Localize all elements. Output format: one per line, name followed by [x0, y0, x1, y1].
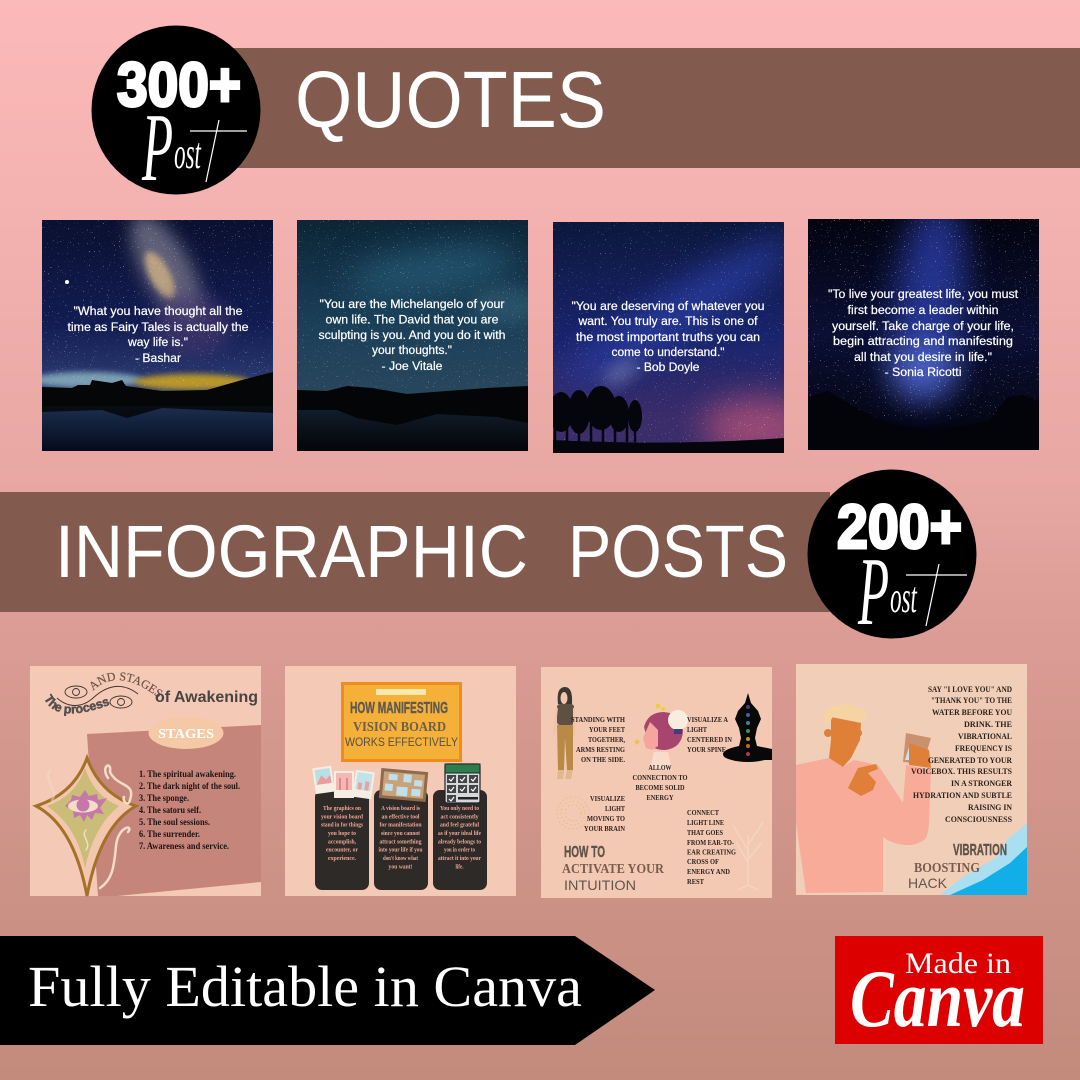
- label: stages: STAGES: [158, 727, 214, 742]
- card: graphics: experience.: [328, 855, 356, 862]
- text: visualize spine: VISUALIZE A: [687, 715, 729, 724]
- card: graphics: encounter, or: [326, 847, 358, 854]
- text: visualize spine: LIGHT: [687, 725, 707, 734]
- badge number: 300+: [117, 51, 241, 120]
- badge script word: P: [142, 92, 173, 201]
- quote text: yourself. Take charge of your life,: [832, 321, 1014, 333]
- text: connect light line: REST: [687, 877, 704, 886]
- list: seven stages: 5. The soul sessions.: [139, 817, 210, 827]
- text: visualize brain: VISUALIZE: [590, 794, 625, 803]
- quote text: - Bob Doyle: [636, 362, 700, 374]
- text: connect light line: CONNECT: [687, 808, 719, 817]
- quote text: way life is.": [127, 337, 188, 349]
- icon: calendar with checks: [445, 764, 480, 803]
- title: vibration boosting hack: VIBRATION: [953, 842, 1007, 859]
- card: vision board tool: into your life if you: [378, 847, 423, 854]
- text: say i love you: IN A STRONGER: [951, 779, 1013, 788]
- quote text: [68, 306, 248, 365]
- curved title: The process: [45, 694, 110, 716]
- icon: polaroid photos: [312, 766, 375, 799]
- curved title: AND STAGES: [90, 672, 163, 697]
- text: say i love you: SAY "I LOVE YOU" AND: [928, 685, 1012, 694]
- card: act consistently: and feel grateful: [440, 822, 479, 829]
- sign: how manifesting vision board works effectively: HOW MANIFESTING: [350, 700, 448, 717]
- text: say i love you: [911, 685, 1013, 824]
- badge script word: [857, 536, 967, 645]
- banner text: Fully Editable in Canva: [28, 954, 582, 1019]
- infographic card: stages of awakening: [30, 666, 261, 896]
- text: connect light line: ENERGY AND: [687, 867, 730, 876]
- quote card: Sonia Ricotti: [808, 196, 1039, 450]
- text: say i love you: RAISING IN: [968, 803, 1012, 812]
- card: vision board tool: you want!: [388, 863, 412, 870]
- title: how to activate your intuition: ACTIVATE YOUR: [562, 862, 665, 877]
- text: visualize brain: MOVING TO: [587, 814, 625, 823]
- title: of awakening: of Awakening: [155, 689, 258, 706]
- title: vibration boosting hack: [909, 844, 1006, 888]
- badge script word: ost: [890, 573, 918, 622]
- card: act consistently: as if your ideal life: [438, 830, 481, 837]
- text: standing: YOUR FEET: [589, 725, 625, 734]
- text: standing: [571, 715, 625, 764]
- text: visualize brain: LIGHT: [605, 804, 625, 813]
- text: connect light line: EAR CREATING: [687, 848, 736, 856]
- illustration: man holding glass: [796, 703, 931, 893]
- quote text: first become a leader within: [848, 305, 998, 317]
- quote text: the most important truths you can: [576, 332, 760, 344]
- title: vibration boosting hack: HACK: [908, 875, 948, 891]
- quote text: - Sonia Ricotti: [884, 367, 962, 379]
- list: seven stages: 4. The satoru self.: [139, 805, 201, 815]
- list: seven stages: 2. The dark night of the soul.: [139, 781, 240, 791]
- title: how to activate your intuition: [562, 844, 665, 893]
- heading: infographic posts: POSTS: [568, 510, 788, 593]
- text: allow connection: ALLOW: [648, 763, 672, 772]
- quote card: Joe Vitale: [297, 220, 542, 451]
- quote text: "To live your greatest life, you must: [828, 289, 1019, 301]
- text: say i love you: HYDRATION AND SUBTLE: [913, 791, 1012, 800]
- card: act consistently: life.: [456, 863, 464, 870]
- text: connect light line: FROM EAR-TO-: [687, 838, 734, 847]
- heading: quotes: QUOTES: [295, 55, 606, 144]
- text: visualize spine: [687, 717, 732, 752]
- title: vibration boosting hack: BOOSTING: [914, 861, 980, 876]
- card: vision board tool: for manifestation: [380, 822, 422, 829]
- icon: sunburst: [557, 797, 589, 829]
- quote text: want. You truly are. This is one of: [577, 316, 758, 328]
- text: standing: ARMS RESTING: [576, 745, 625, 754]
- text: connect light line: THAT GOES: [687, 828, 723, 837]
- text: standing: STANDING WITH: [571, 715, 625, 724]
- quote text: "You are deserving of whatever you: [572, 301, 765, 313]
- card: act consistently: [433, 790, 487, 890]
- infographic card: vibration boosting hack: [796, 664, 1027, 895]
- text: allow connection: CONNECTION TO: [632, 773, 688, 782]
- sign: how manifesting vision board works effectively: [342, 684, 460, 760]
- text: connect light line: CROSS OF: [687, 857, 719, 866]
- card: act consistently: you in order to: [444, 847, 475, 854]
- label: stages: [148, 717, 224, 749]
- icon: standing woman: [554, 687, 574, 779]
- text: say i love you: VIBRATIONAL: [958, 732, 1012, 741]
- text: say i love you: VOICEBOX. THIS RESULTS: [911, 767, 1012, 776]
- infographic card: activate your intuition: [541, 667, 773, 898]
- curved title: [45, 672, 163, 716]
- card: act consistently: You only need to: [440, 805, 479, 812]
- card: graphics: The graphics on: [323, 805, 361, 812]
- badge script word: ost: [174, 129, 202, 178]
- quote text: time as Fairy Tales is actually the: [68, 322, 248, 334]
- text: say i love you: WATER BEFORE YOU: [932, 708, 1012, 717]
- text: say i love you: DRINK. THE: [964, 720, 1012, 729]
- list: seven stages: 7. Awareness and service.: [139, 841, 229, 851]
- quote text: - Joe Vitale: [382, 361, 442, 373]
- text: allow connection: [632, 765, 688, 800]
- title: how to activate your intuition: HOW TO: [564, 844, 605, 861]
- card: vision board tool: [374, 790, 428, 890]
- card: graphics: stand in for things: [321, 822, 363, 829]
- arrow banner: fully editable in canva: [0, 936, 655, 1045]
- card: act consistently: attract it into your: [438, 855, 481, 862]
- banner: infographic posts: [0, 492, 830, 612]
- quote text: [318, 299, 506, 373]
- quote text: "You are the Michelangelo of your: [320, 299, 505, 311]
- text: allow connection: BECOME SOLID: [636, 783, 684, 792]
- card: graphics: your vision board: [321, 813, 363, 820]
- quote text: sculpting is you. And you do it with: [318, 330, 506, 342]
- logo: made in canva: [835, 936, 1043, 1044]
- text: standing: TOGETHER,: [588, 735, 625, 744]
- text: say i love you: "THANK YOU" TO THE: [931, 696, 1012, 705]
- heading: infographic posts: INFOGRAPHIC: [55, 510, 528, 593]
- card: act consistently: already belongs to: [438, 838, 481, 845]
- card: vision board tool: A vision board is: [381, 805, 420, 812]
- quote text: all that you desire in life.": [854, 352, 992, 364]
- card: vision board tool: don't know what: [383, 855, 419, 862]
- icon: meditating silhouette with chakras: [723, 693, 773, 762]
- logo small text: Made in: [905, 947, 1011, 980]
- quote text: [828, 289, 1019, 379]
- list: seven stages: 3. The sponge.: [139, 793, 189, 803]
- card: vision board tool: an effective tool: [382, 813, 420, 820]
- text: say i love you: GENERATED TO YOUR: [928, 756, 1013, 765]
- card: graphics: [315, 790, 369, 890]
- infographic card: vision board: [285, 666, 516, 896]
- card: graphics: accomplish,: [328, 838, 356, 845]
- card: act consistently: act consistently: [440, 813, 479, 820]
- text: visualize brain: YOUR BRAIN: [584, 824, 626, 833]
- quote text: come to understand.": [612, 347, 724, 359]
- text: visualize spine: YOUR SPINE: [687, 745, 726, 754]
- quote text: - Bashar: [135, 353, 181, 365]
- text: connect light line: [687, 808, 736, 886]
- title: how to activate your intuition: INTUITION: [564, 877, 636, 893]
- text: visualize spine: CENTERED IN: [687, 735, 733, 744]
- text: visualize brain: [584, 796, 625, 831]
- quote text: [572, 301, 764, 374]
- text: standing: ON THE SIDE.: [581, 755, 625, 764]
- badge script word: P: [858, 536, 889, 645]
- quote card: Bob Doyle: [553, 222, 784, 453]
- quote text: your thoughts.": [372, 345, 452, 357]
- icon: mystic eye diamond: [36, 758, 136, 896]
- banner: quotes: [230, 48, 1080, 168]
- card: vision board tool: attract something: [380, 838, 422, 845]
- sign: how manifesting vision board works effectively: VISION BOARD: [353, 720, 446, 735]
- quote text: own life. The David that you are: [326, 314, 498, 326]
- list: seven stages: 6. The surrender.: [139, 829, 200, 839]
- quote card: Bashar: [42, 220, 273, 451]
- icon: woman with lightbulb: [634, 704, 688, 770]
- silhouette: trees: [549, 386, 784, 453]
- icon: faint tree: [733, 822, 763, 890]
- badge: 300+ post: [92, 26, 260, 201]
- icon: cork board: [379, 768, 428, 802]
- quote text: "What you have thought all the: [74, 306, 242, 318]
- list: seven stages: 1. The spiritual awakening.: [139, 769, 236, 779]
- text: say i love you: CONSCIOUSNESS: [945, 815, 1012, 824]
- logo script text: Canva: [850, 953, 1025, 1044]
- text: connect light line: LIGHT LINE: [687, 818, 724, 827]
- list: seven stages: [139, 769, 240, 851]
- badge: 200+ post: [808, 470, 976, 645]
- sign: how manifesting vision board works effectively: WORKS EFFECTIVELY: [345, 737, 458, 749]
- card: vision board tool: since you cannot: [381, 830, 421, 837]
- badge number: 200+: [837, 493, 962, 562]
- badge script word: [141, 92, 247, 201]
- card: graphics: you hope to: [328, 830, 356, 837]
- text: say i love you: FREQUENCY IS: [955, 744, 1012, 753]
- illustration: water wave: [940, 823, 1027, 895]
- text: allow connection: ENERGY: [646, 793, 674, 802]
- quote text: begin attracting and manifesting: [833, 336, 1013, 348]
